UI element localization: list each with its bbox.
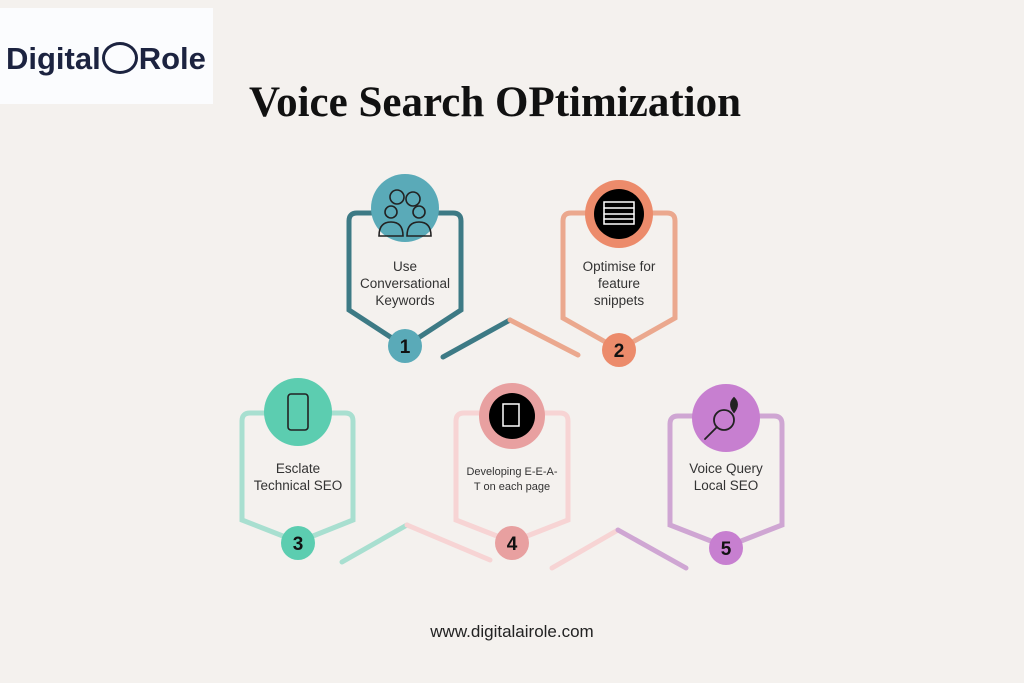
text 3: Esclate [276,461,320,476]
card 2: 2 [614,341,624,362]
text 3: Technical SEO [254,478,342,493]
text 1: Use [393,259,417,274]
footer url: www.digitalairole.com [430,622,594,641]
card 3 [242,378,353,560]
card 1: 1 [400,337,411,358]
logo [0,8,213,104]
card 5 [670,384,782,565]
text 1: Keywords [375,293,435,308]
text 2 [583,259,656,308]
connector row 2 [342,525,686,568]
card 2 [563,180,675,367]
text 2: feature [598,276,640,291]
text 5: Local SEO [694,478,758,493]
card 1 [349,174,461,363]
text 4 [466,466,558,493]
text 4: T on each page [474,481,550,493]
text 5: Voice Query [689,461,763,476]
card 4 [456,383,568,560]
card 5: 5 [721,539,732,560]
logo: Digital Role [6,41,206,76]
text 4: Developing E-E-A- [466,466,558,478]
text 1: Conversational [360,276,450,291]
card 4: 4 [507,534,518,555]
text 2: Optimise for [583,259,655,274]
text 5 [689,461,763,493]
title: Voice Search OPtimization [249,79,741,126]
card 3: 3 [293,534,303,555]
text 3 [254,461,342,493]
text 2: snippets [594,293,644,308]
connector row 1 [443,320,578,357]
text 1 [360,259,450,308]
